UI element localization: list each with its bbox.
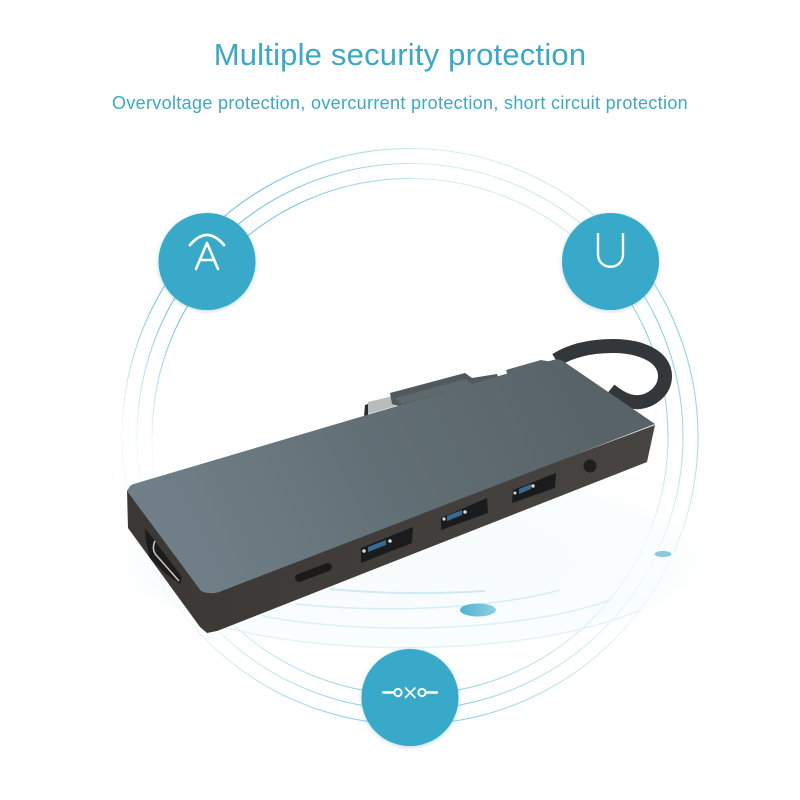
top face (127, 359, 655, 593)
USB ports (361, 473, 556, 563)
floor ellipses (215, 589, 640, 648)
cable (556, 346, 665, 402)
USB hub (127, 346, 665, 633)
subtitle: Overvoltage protection, overcurrent protection, short circuit protection (112, 93, 688, 113)
concentric rings (122, 148, 698, 724)
front face (127, 425, 655, 633)
HDMI port (145, 528, 182, 584)
USB-C plug (364, 360, 552, 417)
icon: short circuit switch (362, 649, 458, 746)
audio jack (584, 460, 596, 472)
blue dots (460, 551, 672, 616)
micro SD slot (299, 567, 328, 578)
icon: ammeter A (158, 213, 256, 310)
title: Multiple security protection (214, 37, 586, 72)
icon: voltage U (562, 213, 659, 310)
floor halo (115, 468, 705, 652)
